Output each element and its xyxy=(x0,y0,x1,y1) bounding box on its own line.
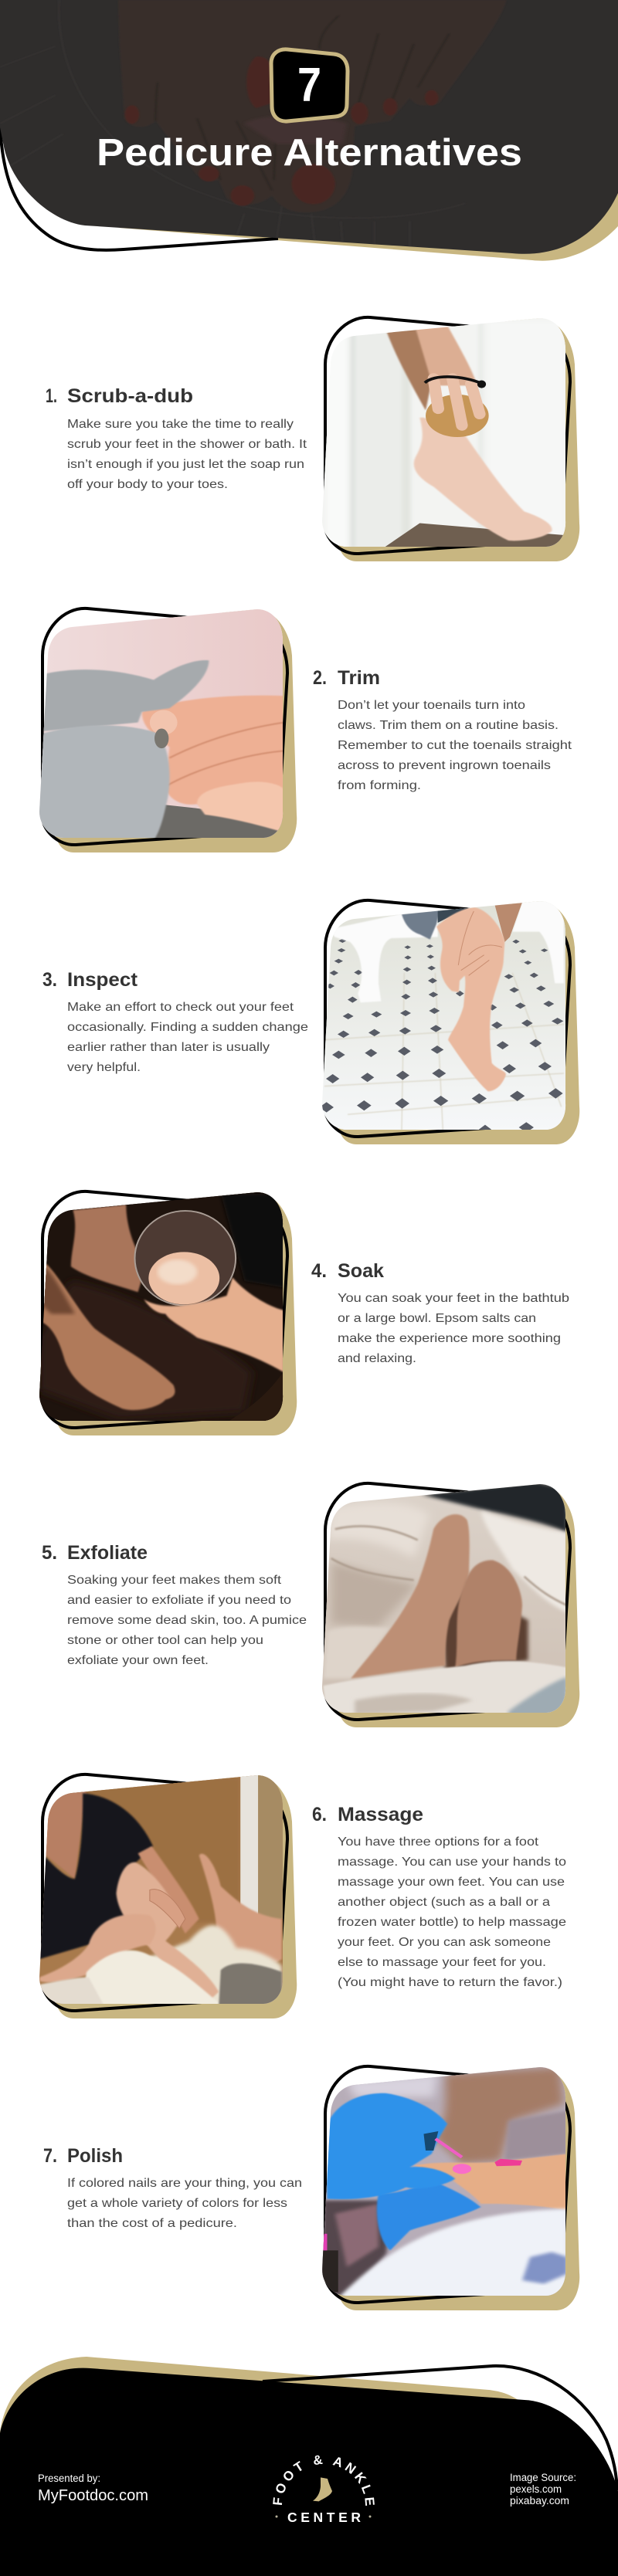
item 5 text: Exfoliate: stone or other tool can help you xyxy=(67,1634,263,1647)
item 2 text: Trim: Don’t let your toenails turn into xyxy=(338,699,525,712)
image source credit: pexels.com xyxy=(510,2483,562,2495)
item 1 image card: scrubbing foot xyxy=(315,311,579,561)
item 4 text: Soak: and relaxing. xyxy=(338,1352,416,1365)
item 5 text: Exfoliate xyxy=(42,1542,307,1667)
item 6 image card: foot massage xyxy=(36,1773,297,2018)
item 6 text: Massage xyxy=(312,1804,566,1989)
item 3 text: Inspect: 3. xyxy=(42,969,57,991)
item 5 text: Exfoliate: remove some dead skin, too. A pumice xyxy=(67,1614,307,1627)
item 2 text: Trim xyxy=(313,667,572,792)
item 5 text: Exfoliate: exfoliate your own feet. xyxy=(67,1654,209,1667)
presented by credit: MyFootdoc.com xyxy=(38,2487,148,2504)
item 2 text: Trim: 2. xyxy=(313,667,327,689)
header background photo of toes xyxy=(0,0,618,263)
item 3 text: Inspect xyxy=(42,969,308,1074)
item 5 text: Exfoliate: Soaking your feet makes them soft xyxy=(67,1574,282,1587)
badge: number 7 xyxy=(271,49,348,121)
presented by credit xyxy=(38,2473,148,2504)
item 2 text: Trim: Trim xyxy=(338,667,380,689)
item 6 text: Massage: Massage xyxy=(338,1804,423,1825)
item 6 text: Massage: another object (such as a ball or a xyxy=(338,1896,550,1909)
image source credit: Image Source: xyxy=(510,2472,576,2483)
item 5 image card: feet in bed sheets xyxy=(319,1482,579,1727)
item 6 text: Massage: 6. xyxy=(312,1804,327,1825)
image source credit: pixabay.com xyxy=(510,2495,569,2507)
item 6 text: Massage: massage your own feet. You can use xyxy=(338,1876,565,1889)
item 2 text: Trim: claws. Trim them on a routine basis. xyxy=(338,719,559,732)
item 3 text: Inspect: Make an effort to check out your feet xyxy=(67,1001,294,1014)
item 7 text: Polish: If colored nails are your thing, you can xyxy=(67,2177,302,2190)
item 3 text: Inspect: earlier rather than later is usually xyxy=(67,1041,270,1054)
image source credit xyxy=(510,2472,576,2507)
item 5 text: Exfoliate: 5. xyxy=(42,1542,57,1564)
presented by credit: Presented by: xyxy=(38,2473,100,2484)
item 4 text: Soak: make the experience more soothing xyxy=(338,1332,561,1345)
item 6 text: Massage: (You might have to return the favor.) xyxy=(338,1976,562,1989)
item 4 text: Soak: Soak xyxy=(338,1260,384,1282)
item 6 text: Massage: massage. You can use your hands to xyxy=(338,1856,566,1869)
item 1 text: Scrub-a-dub: Scrub-a-dub xyxy=(67,385,193,407)
item 7 text: Polish: than the cost of a pedicure. xyxy=(67,2217,237,2230)
item 2 text: Trim: from forming. xyxy=(338,779,421,792)
item 4 text: Soak: or a large bowl. Epsom salts can xyxy=(338,1312,536,1325)
item 5 text: Exfoliate: and easier to exfoliate if you need to xyxy=(67,1594,291,1607)
item 6 text: Massage: your feet. Or you can ask someone xyxy=(338,1936,551,1949)
item 1 text: Scrub-a-dub: isn’t enough if you just let the soap run xyxy=(67,458,304,471)
item 4 text: Soak xyxy=(311,1260,569,1365)
header banner xyxy=(0,0,618,263)
item 1 text: Scrub-a-dub: Make sure you take the time to really xyxy=(67,418,294,431)
item 3 text: Inspect: Inspect xyxy=(67,969,138,991)
item 1 text: Scrub-a-dub xyxy=(46,385,307,491)
item 7 image card: painting toenails xyxy=(319,2064,579,2310)
item 4 text: Soak: You can soak your feet in the bathtub xyxy=(338,1292,569,1305)
item 7 text: Polish: 7. xyxy=(43,2145,57,2167)
item 1 text: Scrub-a-dub: 1. xyxy=(46,385,57,407)
item 4 image card: bowl of epsom salts xyxy=(36,1190,297,1435)
item 2 image card: trimming toenails xyxy=(36,605,297,852)
item 7 text: Polish: get a whole variety of colors for less xyxy=(67,2197,287,2210)
item 1 text: Scrub-a-dub: off your body to your toes. xyxy=(67,478,228,491)
logo: Foot and Ankle Center: CENTER xyxy=(287,2510,361,2525)
item 7 text: Polish xyxy=(43,2145,302,2230)
item 2 text: Trim: across to prevent ingrown toenails xyxy=(338,759,551,772)
item 6 text: Massage: You have three options for a foot xyxy=(338,1835,539,1849)
item 3 image card: legs on tiled floor xyxy=(317,896,585,1144)
item 3 text: Inspect: occasionally. Finding a sudden change xyxy=(67,1021,308,1034)
icon: foot xyxy=(313,2477,332,2501)
badge: number 7: 7 xyxy=(297,59,321,112)
title: Pedicure Alternatives xyxy=(97,132,522,174)
item 1 text: Scrub-a-dub: scrub your feet in the shower or bath. It xyxy=(67,438,307,451)
item 3 text: Inspect: very helpful. xyxy=(67,1061,141,1074)
item 5 text: Exfoliate: Exfoliate xyxy=(67,1542,148,1564)
logo: Foot and Ankle Center: FOOT & ANKLE xyxy=(273,2456,375,2506)
logo: Foot and Ankle Center xyxy=(273,2456,375,2525)
item 7 text: Polish: Polish xyxy=(67,2145,123,2167)
item 4 text: Soak: 4. xyxy=(311,1260,327,1282)
item 2 text: Trim: Remember to cut the toenails straight xyxy=(338,739,572,752)
item 6 text: Massage: frozen water bottle) to help massage xyxy=(338,1916,566,1929)
footer panel xyxy=(0,2357,618,2576)
item 6 text: Massage: else to massage your feet for you. xyxy=(338,1956,546,1969)
